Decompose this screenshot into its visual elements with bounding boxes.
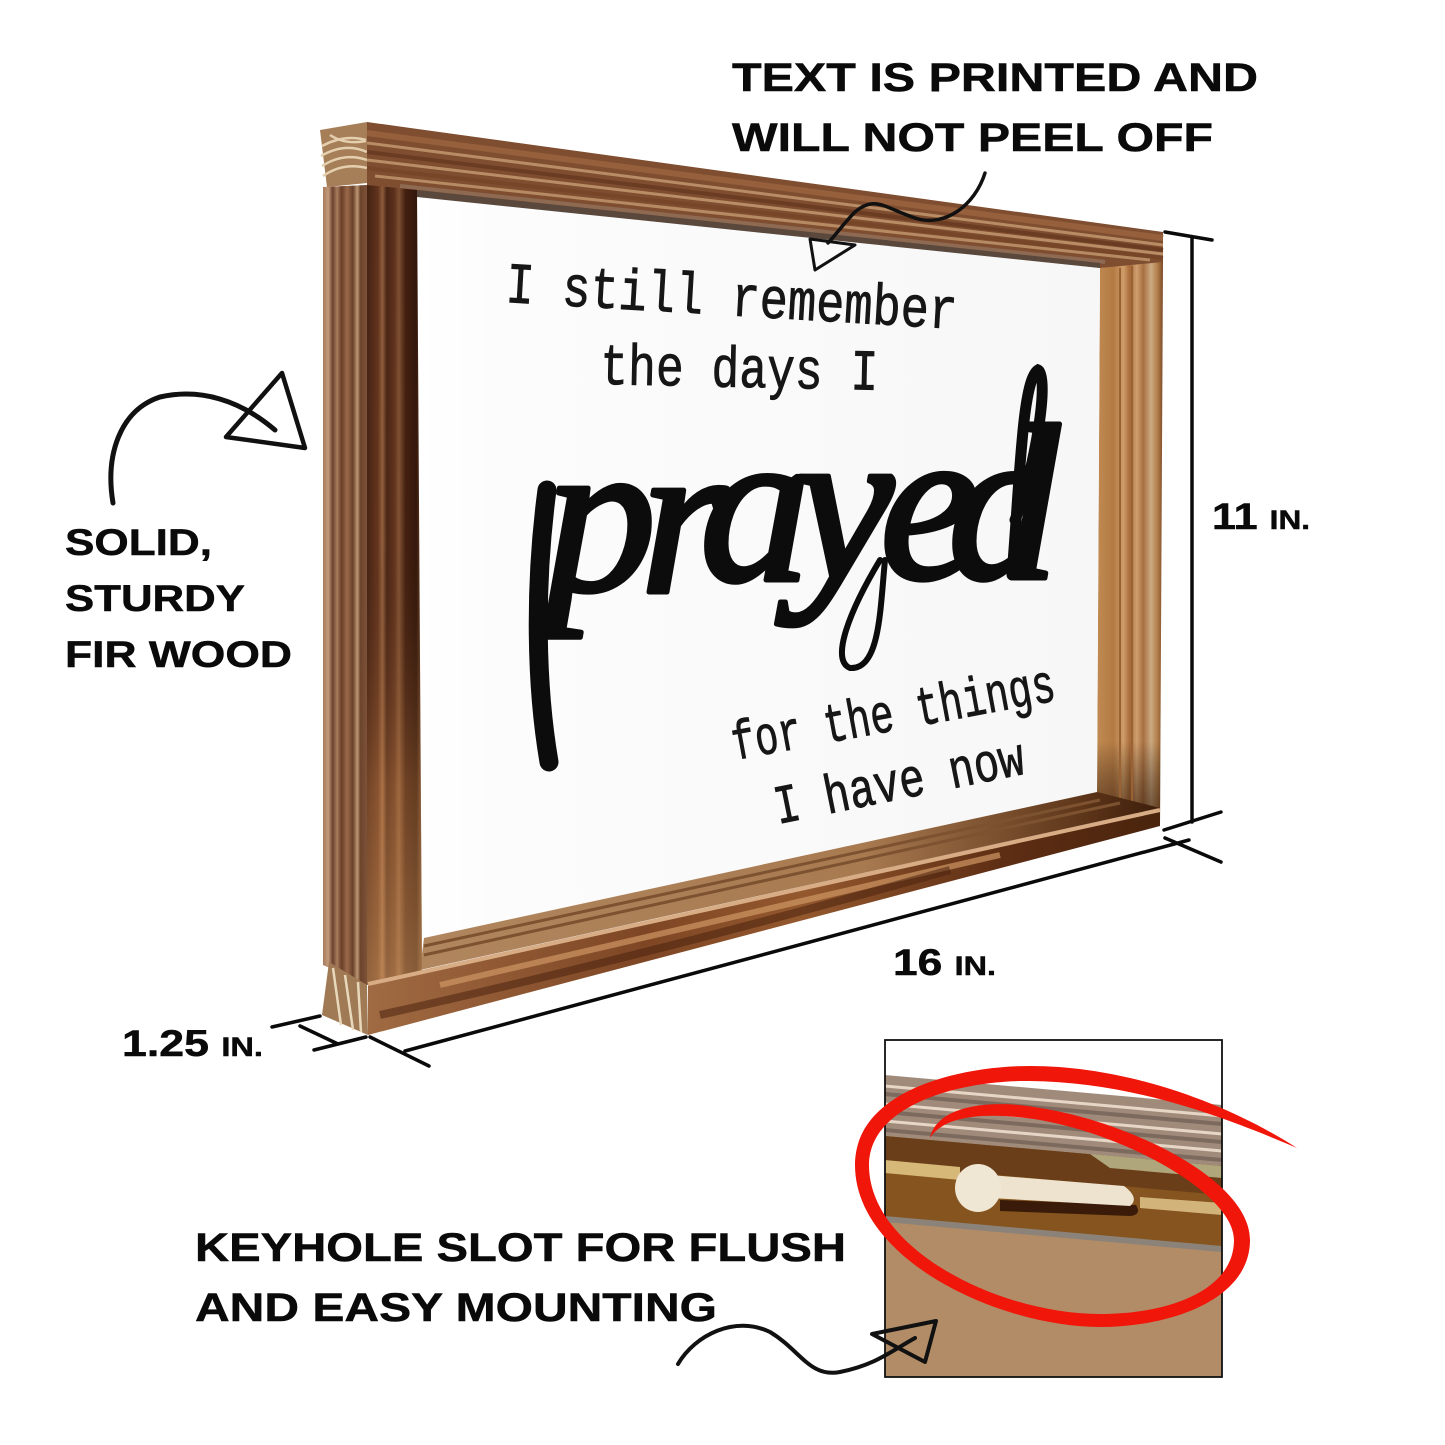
product: wooden framed sign [320,122,1163,1035]
caption: solid wood: STURDY [65,578,245,619]
sign text: script word prayed: prayed [531,381,1060,641]
left side of frame [323,185,367,985]
end grain bottom corner [322,962,368,1035]
white sign panel [417,195,1100,938]
keyhole [955,1164,1138,1216]
caption: keyhole slot [195,1226,846,1330]
caption: solid wood [65,522,292,675]
front left stile [367,185,422,985]
label: 11 in: 11 IN. [1212,496,1310,537]
label: 1.25 in: 1.25 IN. [122,1023,263,1064]
top rail [367,122,1163,268]
dark slot band [885,1136,1222,1246]
arrow: to wood frame [111,373,305,503]
sign text: serif lines [504,255,1061,841]
sign text: serif lines: I still remember [504,255,959,347]
caption: solid wood: FIR WOOD [65,634,292,675]
inset: keyhole detail photo [885,1040,1222,1377]
dimension lines [272,232,1221,1066]
right rail [1097,262,1163,826]
caption: text is printed: WILL NOT PEEL OFF [732,116,1213,160]
arrow: to printed text [810,173,985,270]
caption: keyhole slot: KEYHOLE SLOT FOR FLUSH [195,1226,846,1270]
wood strip [885,1075,1222,1167]
caption: text is printed: TEXT IS PRINTED AND [732,56,1258,100]
end grain top corner [320,122,367,187]
caption: text is printed [732,56,1258,160]
caption: keyhole slot: AND EASY MOUNTING [195,1286,717,1330]
sign text: serif lines: for the things [727,655,1061,777]
bottom rail inner [420,792,1160,970]
bottom rail front [368,808,1160,1035]
sign text: serif lines: the days I [600,337,879,408]
caption: solid wood: SOLID, [65,522,212,563]
label: 16 in: 16 IN. [893,942,996,983]
red circle highlight [855,1066,1297,1327]
sign text: script word prayed [531,370,1060,762]
sign text: serif lines: I have now [769,728,1030,841]
arrow: to keyhole photo [678,1321,936,1373]
